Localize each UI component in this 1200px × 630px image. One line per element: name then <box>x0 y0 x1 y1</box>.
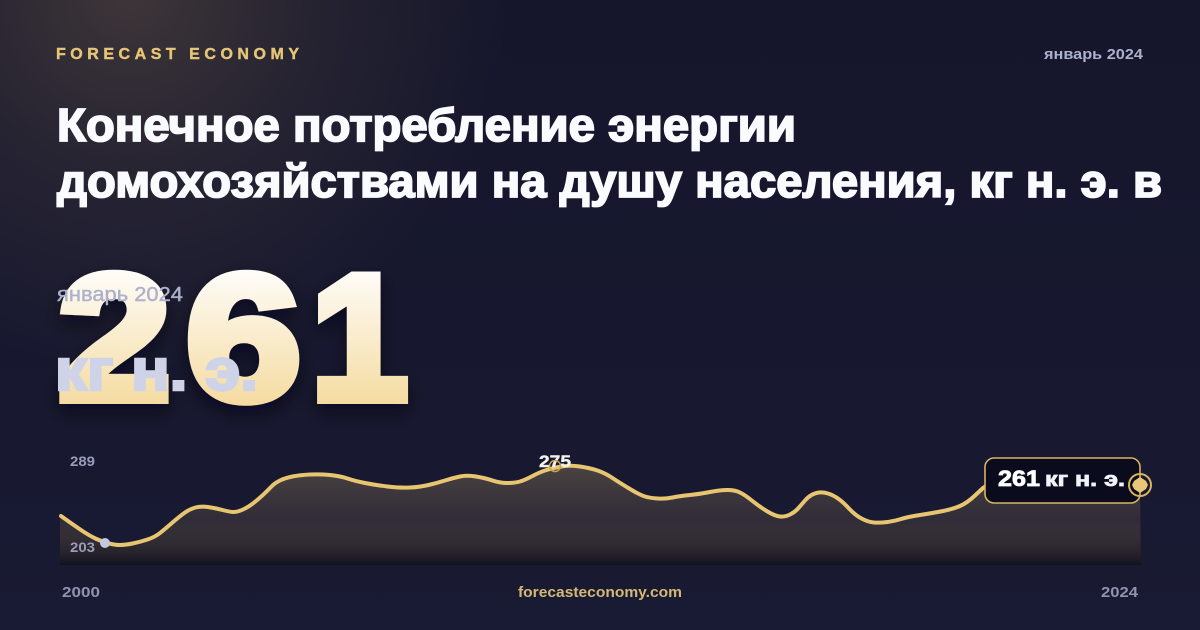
title: Конечное потребление энергии <box>57 99 796 151</box>
peak marker <box>550 460 560 472</box>
chart <box>60 452 1151 565</box>
date under title: январь 2024 <box>57 284 183 306</box>
big number <box>58 238 408 437</box>
brand eyebrow: FORECAST ECONOMY <box>56 46 299 63</box>
axis min label: 203 <box>70 540 96 555</box>
end marker <box>1129 474 1151 496</box>
title <box>57 99 1162 207</box>
x axis end: 2024 <box>1101 585 1138 601</box>
axis max label: 289 <box>70 454 95 469</box>
chart line <box>61 466 1000 545</box>
callout: 261 <box>998 466 1040 491</box>
peak value label: 275 <box>539 452 571 471</box>
big number: 2 <box>58 238 171 437</box>
big number: 1 <box>311 238 408 437</box>
callout <box>985 458 1140 503</box>
title: домохозяйствами на душу населения, кг н. э. в <box>57 155 1162 207</box>
unit label: кг н. э. <box>55 338 258 403</box>
callout: кг н. э. <box>1045 469 1125 491</box>
x axis start: 2000 <box>62 585 100 601</box>
chart area <box>60 466 1141 565</box>
minimum marker <box>100 538 110 548</box>
big number: 6 <box>186 238 301 437</box>
date top right: январь 2024 <box>1044 46 1144 63</box>
source url: forecasteconomy.com <box>518 585 682 601</box>
